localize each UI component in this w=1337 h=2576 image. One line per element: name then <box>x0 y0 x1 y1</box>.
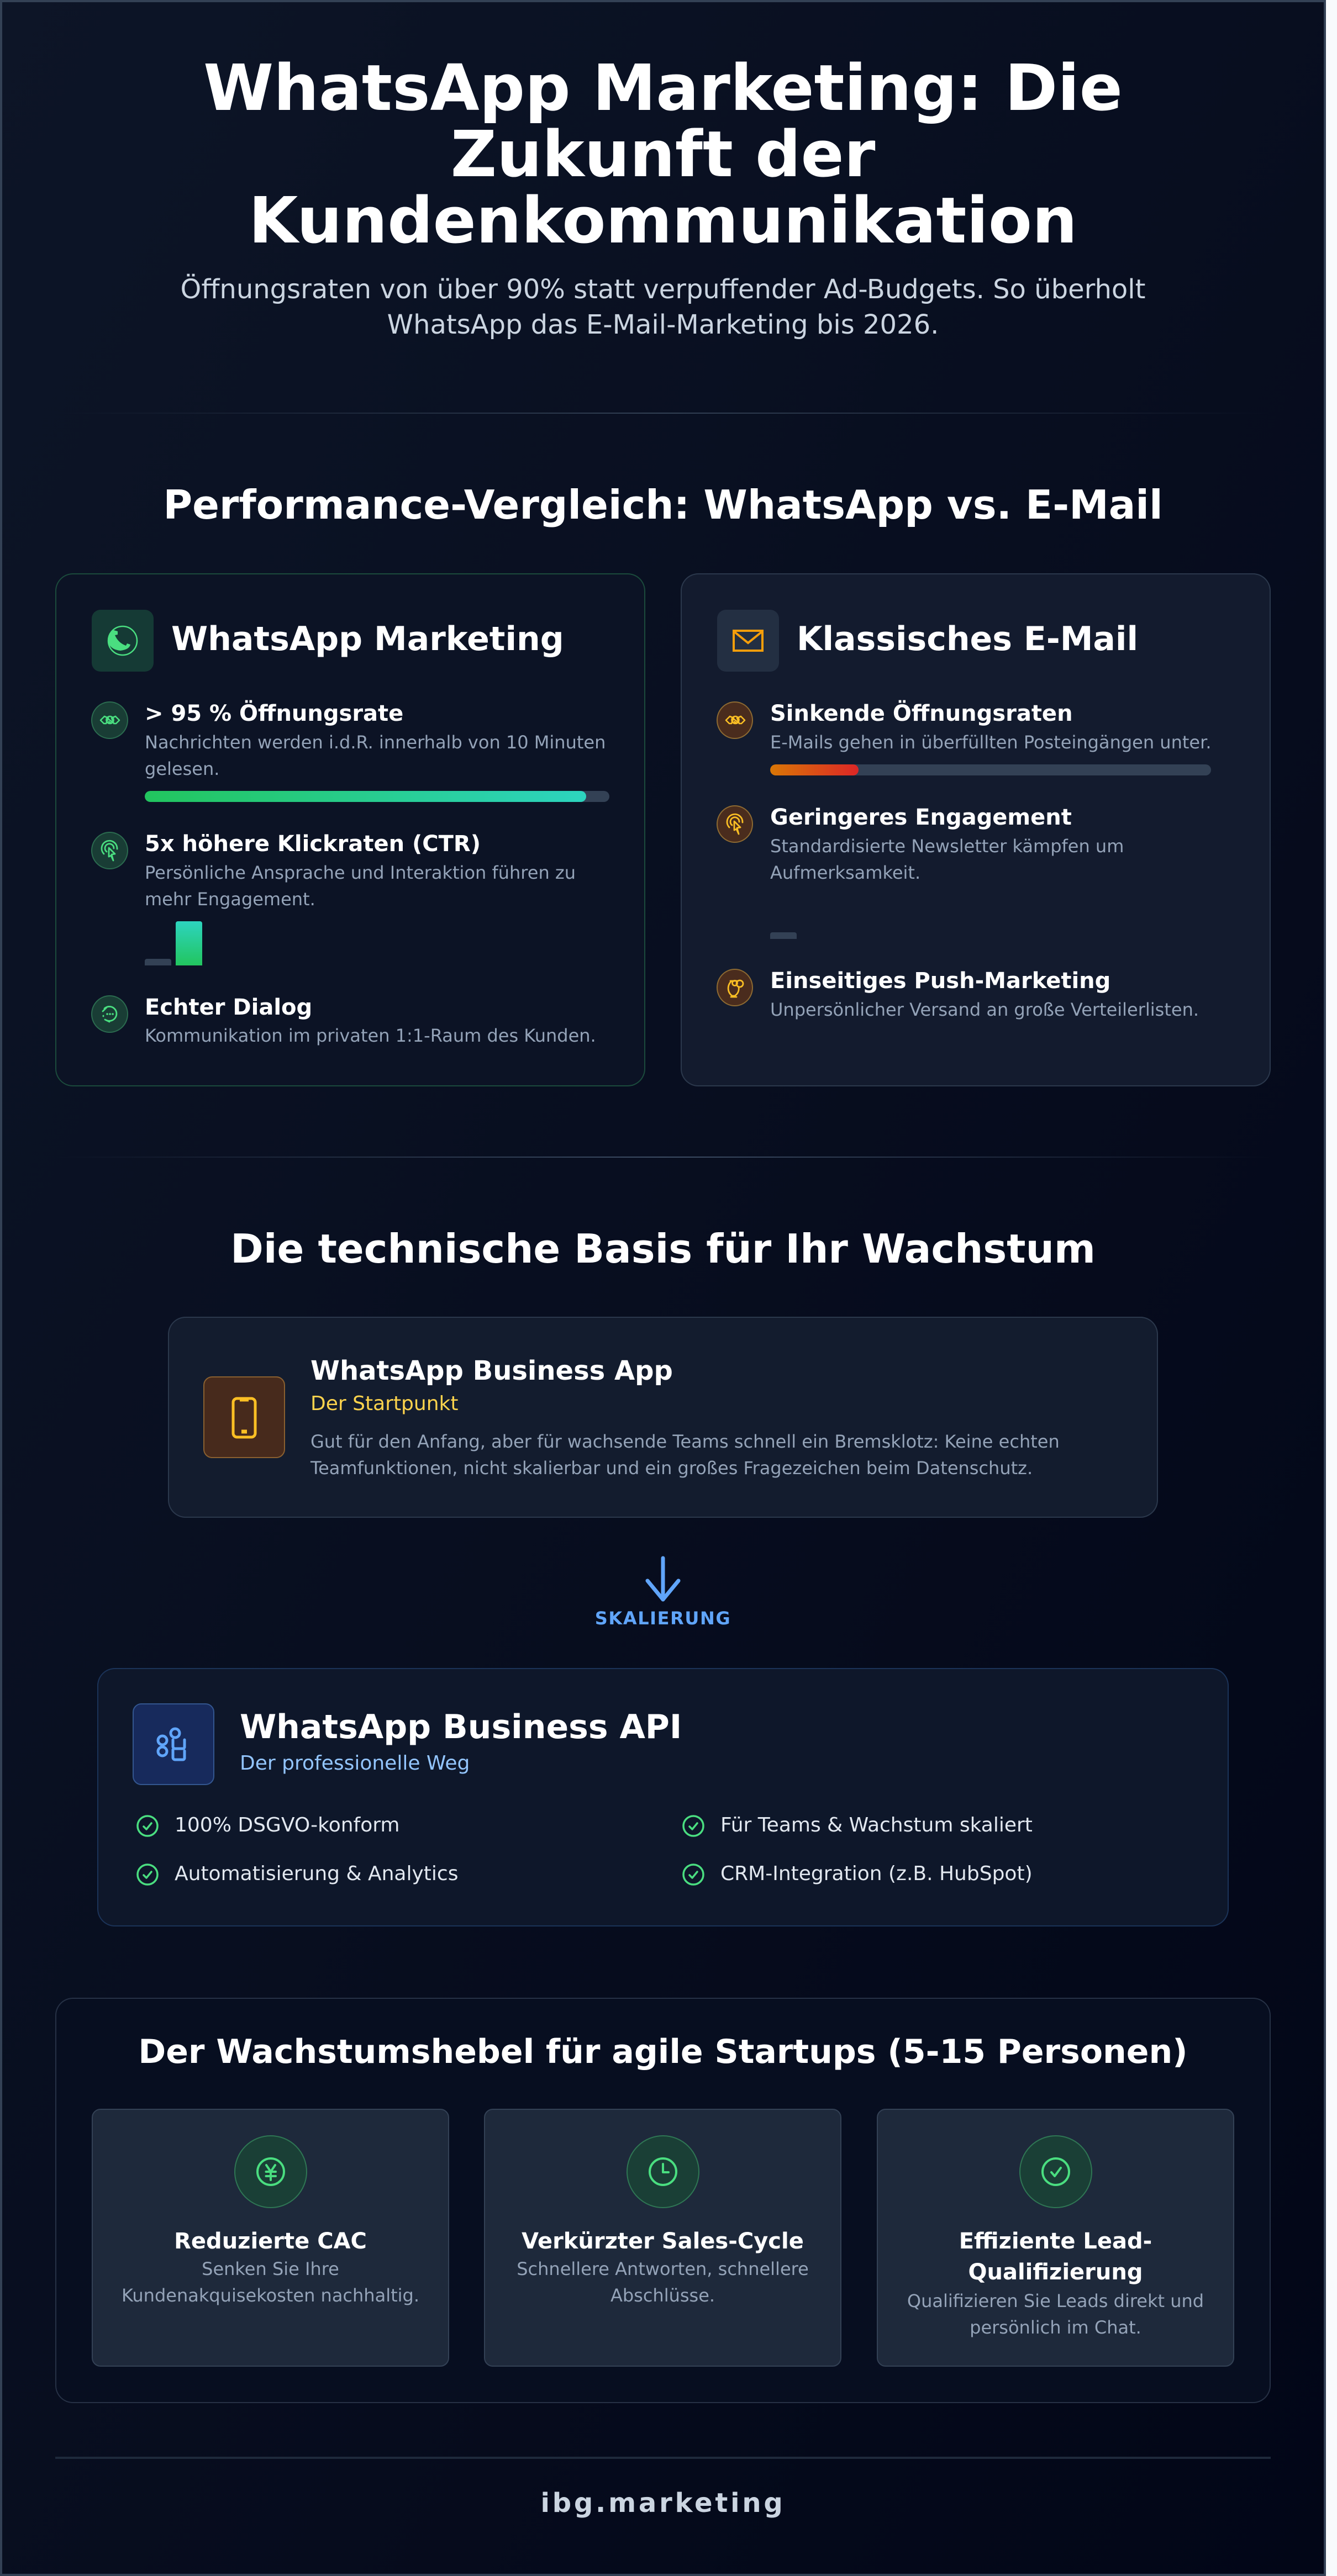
title: Zukunft der <box>451 118 875 192</box>
bar chart: low engagement <box>770 932 797 939</box>
panel heading: Klassisches E-Mail <box>797 620 1138 658</box>
card: Reduzierte CAC <box>92 2109 449 2367</box>
progress bar 95% <box>145 791 609 802</box>
card: Sales-Cycle <box>484 2109 841 2367</box>
card subtitle: Der professionelle Weg <box>240 1752 470 1775</box>
subtitle <box>181 274 1145 340</box>
card title: Qualifizierung <box>968 2260 1143 2285</box>
subtitle: WhatsApp das E-Mail-Marketing bis 2026. <box>387 309 939 340</box>
card description: Kundenakquisekosten nachhaltig. <box>122 2285 419 2306</box>
footer brand: ibg.marketing <box>540 2488 786 2519</box>
icon: handshake <box>91 701 128 739</box>
feature: DSGVO <box>136 1814 400 1837</box>
card title: Verkürzter Sales-Cycle <box>522 2229 804 2254</box>
icon: check <box>682 1815 704 1837</box>
panel: WhatsApp Business App <box>168 1317 1158 1518</box>
metric description <box>770 836 1124 883</box>
metric description: E-Mails gehen in überfüllten Posteingängen unter. <box>770 732 1211 753</box>
icon: check <box>1019 2135 1092 2208</box>
card description: Schnellere Antworten, schnellere <box>517 2258 809 2279</box>
metric description: Kommunikation im privaten 1:1-Raum des Kunden. <box>145 1025 596 1046</box>
feature text: Automatisierung & Analytics <box>175 1862 458 1885</box>
metric title: > 95 % Öffnungsrate <box>145 701 403 726</box>
bar: E-Mail <box>770 932 797 939</box>
arrow label: SKALIERUNG <box>595 1608 731 1629</box>
icon: pointer click <box>717 805 753 843</box>
card description <box>485 2256 840 2309</box>
panel: Klassisches E-Mail <box>681 573 1271 1086</box>
card title <box>878 2226 1233 2288</box>
metric description: Persönliche Ansprache und Interaktion führen zu <box>145 862 576 883</box>
metric description: gelesen. <box>145 758 219 779</box>
card title: Effiziente Lead- <box>959 2229 1152 2254</box>
icon: clock <box>627 2135 699 2208</box>
title: Kundenkommunikation <box>249 184 1077 258</box>
metric description: mehr Engagement. <box>145 889 315 910</box>
header <box>181 51 1145 340</box>
card description: persönlich im Chat. <box>970 2317 1141 2338</box>
item: Geringeres Engagement <box>717 805 1124 939</box>
card description: Senken Sie Ihre <box>202 2258 339 2279</box>
icon: phone <box>203 1376 285 1458</box>
item: Echter Dialog <box>91 995 596 1046</box>
card title: WhatsApp Business App <box>310 1355 673 1386</box>
icon: pointer click <box>91 832 128 869</box>
progress bar 20% <box>770 764 1211 775</box>
icon: WhatsApp <box>92 610 154 672</box>
item: Sinkende Öffnungsraten <box>717 700 1211 775</box>
icon: check <box>136 1864 159 1886</box>
icon: API <box>133 1703 214 1785</box>
icon: yen <box>234 2135 307 2208</box>
subtitle: Öffnungsraten von über 90% statt verpuffender Ad-Budgets. So überholt <box>181 274 1145 305</box>
feature text: Für Teams & Wachstum skaliert <box>720 1814 1033 1836</box>
metric description: Nachrichten werden i.d.R. innerhalb von 10 Minuten <box>145 732 606 753</box>
feature: CRM <box>678 1859 1120 1889</box>
feature: Automatisierung <box>136 1862 458 1886</box>
metric description <box>145 732 606 779</box>
item: Klickraten <box>91 831 576 965</box>
arrow icon <box>645 1556 681 1602</box>
icon: check <box>136 1815 159 1837</box>
panel heading: Der Wachstumshebel für agile Startups (5-15 Personen) <box>138 2033 1188 2071</box>
title <box>203 51 1123 258</box>
panel: WhatsApp Business API <box>97 1668 1229 1926</box>
card description: Qualifizieren Sie Leads direkt und <box>907 2290 1204 2311</box>
metric description <box>145 862 576 910</box>
metric title: Geringeres Engagement <box>770 805 1072 830</box>
panel: WhatsApp Marketing <box>55 573 645 1086</box>
metric title: Einseitiges Push-Marketing <box>770 968 1110 994</box>
card description <box>878 2288 1233 2341</box>
icon: check <box>682 1864 704 1886</box>
metric description: Unpersönlicher Versand an große Verteilerlisten. <box>770 999 1199 1020</box>
bar chart: CTR <box>145 921 202 965</box>
panel: Wachstumshebel <box>55 1998 1271 2403</box>
metric title: 5x höhere Klickraten (CTR) <box>145 831 481 857</box>
bar: E-Mail <box>145 959 171 965</box>
metric description: Aufmerksamkeit. <box>770 862 920 883</box>
item: Öffnungsrate <box>91 700 609 802</box>
feature text: CRM-Integration (z.B. HubSpot) <box>720 1862 1033 1885</box>
heading: Performance-Vergleich: Performance-Vergleich: WhatsApp vs. E-Mail <box>163 482 1163 528</box>
card description <box>93 2256 448 2309</box>
card description: Gut für den Anfang, aber für wachsende Teams schnell ein Bremsklotz: Keine echten <box>310 1431 1060 1452</box>
icon: megaphone vase <box>717 969 753 1006</box>
icon: dialog <box>91 995 128 1033</box>
heading: Technische Basis: Die technische Basis für Ihr Wachstum <box>230 1226 1096 1272</box>
card description <box>310 1431 1060 1479</box>
card: Lead-Qualifizierung <box>877 2109 1234 2367</box>
metric description: Standardisierte Newsletter kämpfen um <box>770 836 1124 857</box>
metric title: Echter Dialog <box>145 995 312 1020</box>
card title: WhatsApp Business API <box>240 1708 682 1746</box>
bar: WhatsApp <box>176 921 202 965</box>
icon: handshake <box>717 701 753 739</box>
icon: mail <box>717 610 779 672</box>
feature text: 100% DSGVO-konform <box>175 1814 400 1836</box>
card description: Abschlüsse. <box>610 2285 715 2306</box>
card subtitle: Der Startpunkt <box>310 1392 459 1415</box>
arrow: scaling <box>595 1556 731 1629</box>
title: WhatsApp Marketing: Die <box>203 51 1123 125</box>
card title: Reduzierte CAC <box>174 2229 367 2254</box>
item: Push-Marketing <box>717 968 1199 1020</box>
feature: Teams <box>682 1814 1033 1837</box>
metric title: Sinkende Öffnungsraten <box>770 701 1073 726</box>
card description: Teamfunktionen, nicht skalierbar und ein großes Fragezeichen beim Datenschutz. <box>310 1458 1033 1479</box>
panel heading: WhatsApp Marketing <box>171 620 564 658</box>
